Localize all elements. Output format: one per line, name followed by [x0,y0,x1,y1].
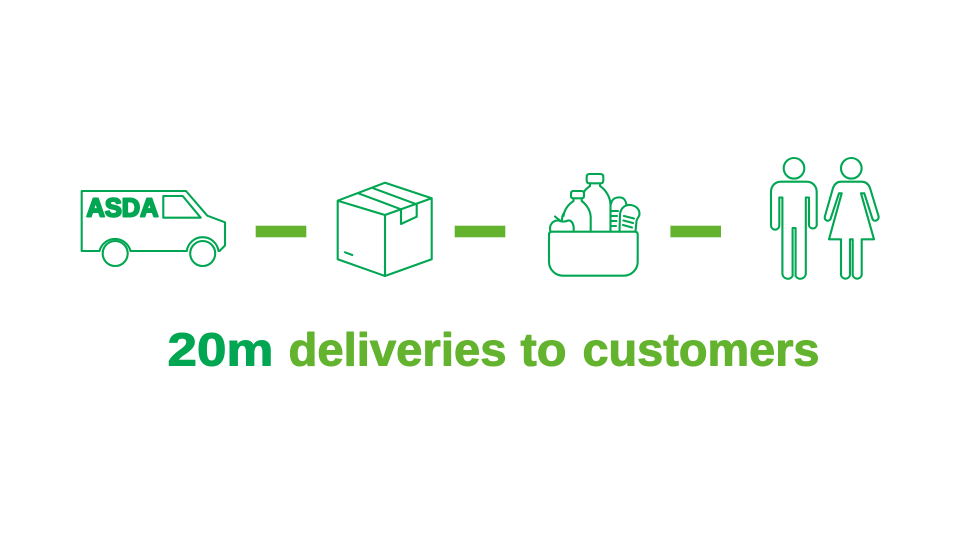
icon: man and woman customers [771,158,879,279]
title: to [520,324,566,376]
title [168,324,820,376]
title: customers [582,324,820,376]
dash connector 1 [256,226,306,237]
man figure [771,158,817,279]
apple [550,213,574,232]
icon: ASDA delivery van [82,191,225,266]
icon: basket of groceries [549,174,640,276]
dash connector 3 [670,226,721,237]
icon: cardboard box [338,183,432,276]
dash connector 2 [455,226,505,237]
small bottle [564,191,591,232]
basket [549,232,638,276]
title: deliveries [288,324,506,376]
bread and loaf [611,197,640,232]
woman figure [825,158,879,279]
title: 20m [168,324,274,376]
large bottle [584,174,610,232]
van logo text: ASDA [86,194,158,222]
